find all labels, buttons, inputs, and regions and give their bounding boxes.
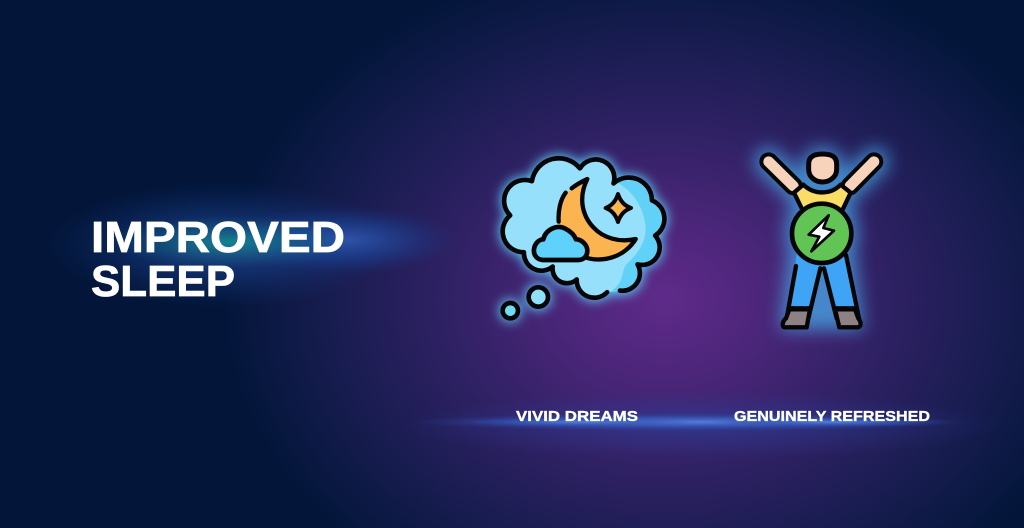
thought bubble large bbox=[529, 287, 548, 307]
legs bbox=[791, 253, 855, 308]
small cloud bbox=[534, 227, 587, 260]
title: SLEEP bbox=[91, 257, 235, 306]
bubbles glow bbox=[499, 284, 552, 322]
thought bubble small bbox=[503, 303, 518, 318]
title: IMPROVED bbox=[91, 213, 345, 262]
icon: thought cloud with moon bbox=[499, 158, 676, 322]
lightning bolt bbox=[809, 215, 834, 251]
label: genuinely refreshed: GENUINELY REFRESHED bbox=[734, 408, 930, 425]
right shoe bbox=[835, 309, 861, 327]
leg outlines bbox=[787, 255, 859, 318]
cloud outline bbox=[503, 158, 664, 298]
left arm bbox=[769, 162, 793, 186]
person glow bbox=[768, 147, 875, 328]
head bbox=[809, 154, 837, 182]
title bbox=[91, 213, 345, 306]
label glow band bbox=[400, 391, 1000, 459]
title glow bbox=[50, 183, 457, 307]
label: vivid dreams: VIVID DREAMS bbox=[516, 408, 638, 425]
green energy circle bbox=[792, 204, 851, 263]
left shoe bbox=[783, 309, 810, 327]
crescent moon bbox=[559, 179, 636, 259]
icon: energised person bbox=[768, 147, 875, 328]
right arm bbox=[850, 162, 874, 186]
cloud shade bbox=[610, 180, 662, 292]
cloud glow bbox=[503, 158, 664, 298]
shirt bbox=[794, 185, 851, 212]
sparkle star bbox=[606, 194, 631, 222]
cloud body bbox=[503, 158, 676, 303]
